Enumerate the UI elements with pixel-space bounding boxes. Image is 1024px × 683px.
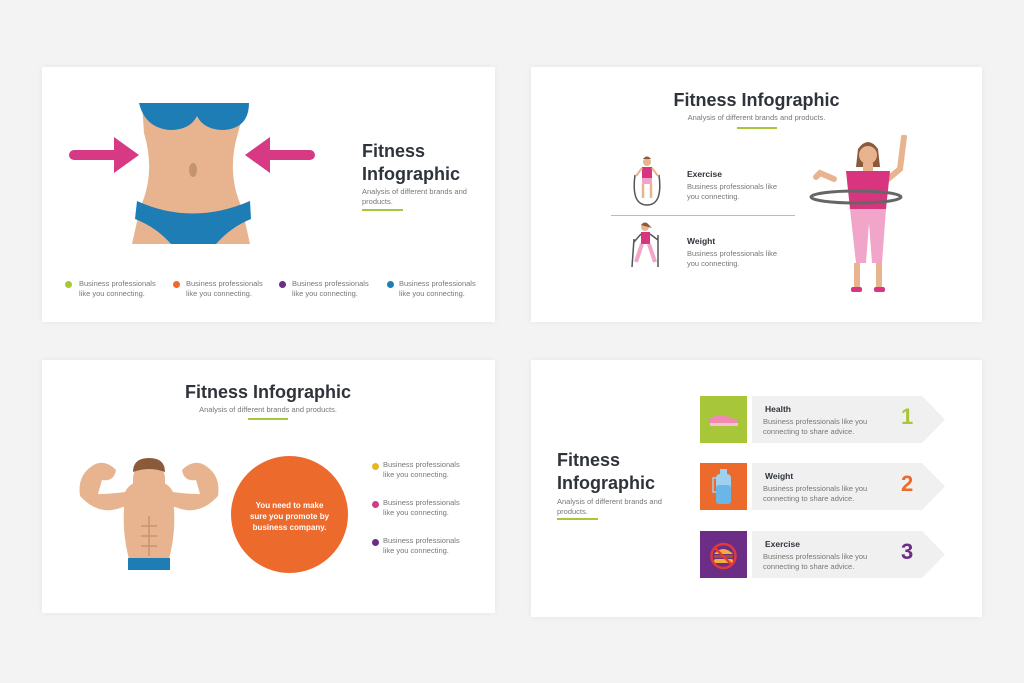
legend bullets: like you connecting. xyxy=(399,289,465,298)
text: exercise: Business professionals like xyxy=(687,182,777,191)
panel: numbered list xyxy=(531,360,982,617)
item 3 exercise: 3 xyxy=(901,539,913,564)
item 2 weight: 2 xyxy=(901,471,913,496)
legend bullets: Business professionals xyxy=(79,279,156,288)
bullets: Business professionals xyxy=(383,536,460,545)
legend bullets: Business professionals xyxy=(292,279,369,288)
item 3 exercise: Business professionals like you xyxy=(763,552,867,561)
text: exercise: you connecting. xyxy=(687,192,740,201)
title: Infographic xyxy=(557,473,655,493)
panel: waist xyxy=(42,67,495,322)
subtitle: Analysis of different brands and products. xyxy=(557,497,662,516)
item 3 exercise xyxy=(700,531,944,578)
bullets: like you connecting. xyxy=(383,546,449,555)
bullets: like you connecting. xyxy=(383,508,449,517)
item 2 weight: Business professionals like you xyxy=(763,484,867,493)
arrow left xyxy=(69,137,139,173)
torso illustration xyxy=(69,103,315,244)
bullets xyxy=(372,460,460,555)
panel: exercise and weight xyxy=(531,67,982,322)
item 1 health: Health xyxy=(765,404,791,414)
title: Fitness xyxy=(557,450,620,470)
item 3 exercise: Exercise xyxy=(765,539,800,549)
title: Fitness Infographic xyxy=(185,382,351,402)
muscle man illustration xyxy=(80,458,218,570)
orange circle callout xyxy=(231,456,348,573)
icon: shoe xyxy=(700,396,747,443)
icon: no burger xyxy=(700,531,747,578)
item 2 weight xyxy=(700,463,944,510)
legend bullets: like you connecting. xyxy=(186,289,252,298)
item 1 health xyxy=(700,396,944,443)
bullets: Business professionals xyxy=(383,498,460,507)
item 2 weight: connecting to share advice. xyxy=(763,494,854,503)
text: weight: Weight xyxy=(687,236,715,246)
icon: jump rope xyxy=(633,156,661,206)
legend bullets: Business professionals xyxy=(399,279,476,288)
orange circle callout: business company. xyxy=(253,523,326,532)
arrow right xyxy=(245,137,315,173)
icon: bottle xyxy=(700,463,747,510)
subtitle: Analysis of different brands and products. xyxy=(362,187,467,206)
title xyxy=(362,141,460,184)
item 1 health: 1 xyxy=(901,404,913,429)
legend bullets xyxy=(65,279,476,298)
item 2 weight: Weight xyxy=(765,471,793,481)
text: exercise: Exercise xyxy=(687,169,722,179)
title: Fitness Infographic xyxy=(673,90,840,110)
orange circle callout: sure you promote by xyxy=(250,512,329,521)
item 1 health: connecting to share advice. xyxy=(763,427,854,436)
title xyxy=(557,450,655,493)
title: Fitness xyxy=(362,141,425,161)
subtitle: Analysis of different brands and products. xyxy=(688,113,825,122)
orange circle callout: You need to make xyxy=(256,501,323,510)
panel: muscle man xyxy=(42,360,495,613)
legend bullets: like you connecting. xyxy=(79,289,145,298)
subtitle: Analysis of different brands and products. xyxy=(199,405,337,414)
text: exercise xyxy=(687,169,777,201)
legend bullets: Business professionals xyxy=(186,279,263,288)
item 3 exercise: connecting to share advice. xyxy=(763,562,854,571)
title: Infographic xyxy=(362,164,460,184)
icon: nordic walking xyxy=(631,222,659,267)
woman with hula hoop xyxy=(810,135,907,292)
text: weight: you connecting. xyxy=(687,259,740,268)
bullets: Business professionals xyxy=(383,460,460,469)
legend bullets: like you connecting. xyxy=(292,289,358,298)
text: weight xyxy=(687,236,777,268)
item 1 health: Business professionals like you xyxy=(763,417,867,426)
text: weight: Business professionals like xyxy=(687,249,777,258)
bullets: like you connecting. xyxy=(383,470,449,479)
